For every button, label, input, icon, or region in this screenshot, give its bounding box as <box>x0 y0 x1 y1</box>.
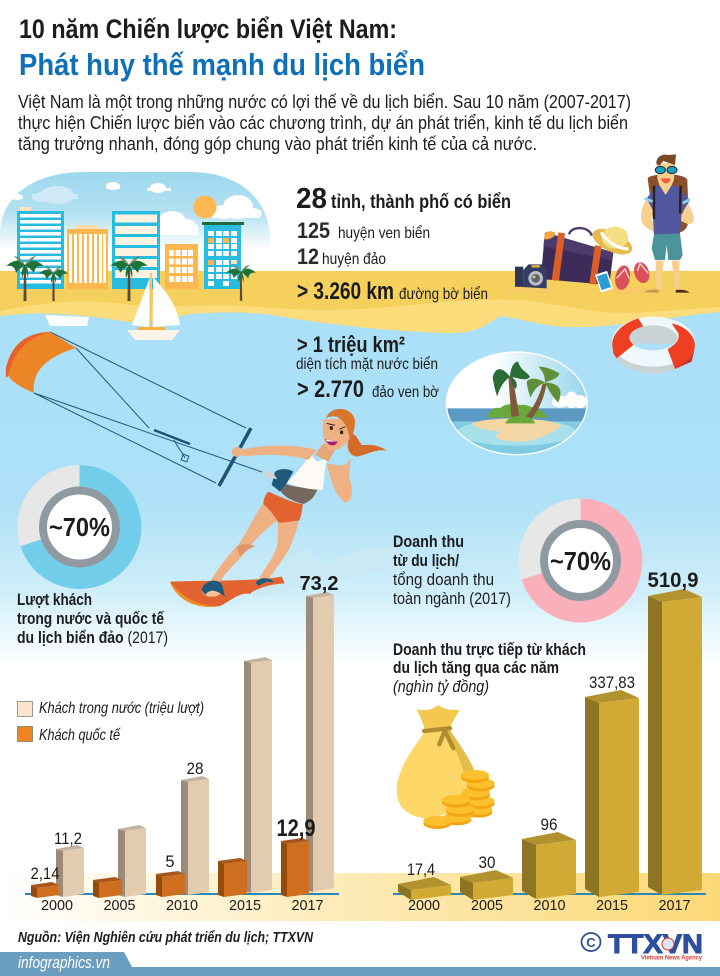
suitcase <box>541 231 613 285</box>
footer bar <box>0 952 720 976</box>
shorts <box>263 492 303 523</box>
shoes <box>644 290 690 293</box>
left coin stack <box>423 795 474 829</box>
year labels: 2015 <box>596 897 628 914</box>
beach sand <box>0 271 720 333</box>
white top <box>287 453 328 490</box>
label: visitors <box>17 590 168 647</box>
building 2 <box>67 225 108 289</box>
sunglasses <box>655 166 677 174</box>
label: revenue share: Doanh thu <box>393 532 464 551</box>
sailboat <box>127 273 180 340</box>
neck <box>315 443 335 462</box>
footer bar: infographics.vn <box>18 953 110 972</box>
woman kitesurfer <box>170 409 387 607</box>
sleeve cuffs <box>645 198 690 203</box>
value labels: 5 <box>165 853 175 871</box>
face <box>323 418 352 451</box>
heading: revenue chart: (nghìn tỷ đồng) <box>393 677 489 696</box>
bottom yellow band <box>0 873 720 921</box>
shorts <box>652 233 683 260</box>
palm fronds right <box>527 367 561 402</box>
eyes and mouth <box>325 423 345 445</box>
logo TTXVN: Vietnam News Agency <box>641 954 702 962</box>
stat: provinces <box>296 183 511 215</box>
stat: island districts <box>297 244 386 269</box>
bag neck <box>417 705 459 730</box>
year labels <box>408 897 690 914</box>
year labels: 2000 <box>41 897 73 914</box>
backpack straps <box>654 186 681 219</box>
camera <box>515 264 547 288</box>
value labels: 12,9 <box>276 815 316 842</box>
stat: coastal districts: 125 <box>297 218 330 243</box>
value labels <box>407 569 698 879</box>
shirt <box>647 186 690 235</box>
value labels: 73,2 <box>300 573 338 595</box>
legend: Khách trong nước (triệu lượt) <box>39 700 204 717</box>
title: 10 năm Chiến lược biển Việt Nam: <box>19 14 397 44</box>
year labels: 2005 <box>104 897 136 914</box>
front bush <box>505 416 535 423</box>
label: revenue share <box>393 532 511 608</box>
value labels: 11,2 <box>54 830 82 848</box>
heading: revenue chart: du lịch tăng qua các năm <box>393 658 559 677</box>
year labels: 2010 <box>166 897 198 914</box>
donut chart: revenue: ~70% <box>550 546 611 576</box>
ponytail <box>348 433 387 457</box>
small boat <box>45 315 89 326</box>
bar chart: revenue <box>398 569 702 914</box>
sun hat <box>589 224 636 260</box>
heading: revenue chart <box>393 640 586 696</box>
city buildings <box>17 207 244 289</box>
label: visitors: du lịch biển đảo (2017) <box>17 628 168 647</box>
building 1 <box>17 207 64 289</box>
stat: coastal islands: > 2.770 <box>297 376 364 403</box>
value labels: 510,9 <box>648 569 698 592</box>
value labels: 28 <box>186 760 204 778</box>
sand shore highlight <box>0 299 720 333</box>
source: Nguồn: Viện Nghiên cứu phát triển du lịch; TTXVN <box>18 929 314 946</box>
right coin stack <box>461 770 495 818</box>
logo TTXVN: C <box>586 935 596 950</box>
stat: sea area: diện tích mặt nước biển <box>296 355 438 373</box>
year labels: 2015 <box>229 897 261 914</box>
intro paragraph <box>18 91 631 154</box>
stat: sea area: > 1 triệu km² <box>297 332 405 357</box>
value labels: 337,83 <box>589 674 635 692</box>
stat: coastal districts <box>297 218 430 243</box>
legs <box>210 503 298 582</box>
icon: kite with lines and bar <box>6 332 262 486</box>
year labels: 2017 <box>658 897 690 914</box>
intro paragraph: thực hiện Chiến lược biển vào các chương trình, dự án phát triển, kinh tế du lịch biển <box>18 112 628 133</box>
donut chart: visitors <box>30 477 130 577</box>
sea background <box>0 300 720 665</box>
stat: provinces: 28 <box>296 183 327 215</box>
year labels: 2000 <box>408 897 440 914</box>
legend <box>18 700 204 744</box>
palm fronds left <box>493 362 530 397</box>
intro paragraph: tăng trưởng nhanh, đóng góp chung vào phát triển kinh tế của cả nước. <box>18 133 537 154</box>
phone <box>595 271 613 292</box>
arms <box>232 446 352 503</box>
island sand <box>472 419 562 442</box>
label: visitors: Lượt khách <box>17 590 92 609</box>
kiteboard <box>170 577 285 607</box>
stat: island districts: huyện đảo <box>322 251 386 268</box>
flip flops <box>613 260 652 291</box>
label: visitors: trong nước và quốc tế <box>17 609 164 628</box>
label: revenue share: toàn ngành (2017) <box>393 589 511 608</box>
tie <box>424 728 453 748</box>
suitcase handle <box>569 228 592 236</box>
year labels <box>41 897 324 914</box>
heading: revenue chart: Doanh thu trực tiếp từ khách <box>393 640 586 659</box>
stat: provinces: tỉnh, thành phố có biển <box>331 192 511 213</box>
intro paragraph: Việt Nam là một trong những nước có lợi thế về du lịch biển. Sau 10 năm (2007-2017) <box>18 91 631 112</box>
international bars <box>31 838 309 898</box>
hair <box>656 154 676 166</box>
money bag with coins <box>397 705 495 829</box>
island bushes <box>487 404 548 418</box>
value labels: 17,4 <box>407 861 435 879</box>
building 4 <box>165 244 198 289</box>
life ring <box>612 317 695 374</box>
domestic bars <box>56 592 334 897</box>
smile <box>661 178 671 183</box>
logo TTXVN: TTXVN <box>608 929 703 959</box>
stat: coastal islands <box>297 376 439 403</box>
building 5 <box>202 222 244 289</box>
stat: island districts: 12 <box>297 244 319 269</box>
bag <box>397 732 476 819</box>
island illustration <box>446 351 588 456</box>
stat: coastline: đường bờ biển <box>399 285 488 303</box>
bar chart: visitors <box>30 573 338 914</box>
year labels: 2017 <box>292 897 324 914</box>
harness hook <box>272 469 293 492</box>
harness belt <box>280 483 317 504</box>
stat: coastline: > 3.260 km <box>297 278 394 305</box>
donut chart: visitors: ~70% <box>49 512 110 542</box>
stat: coastal districts: huyện ven biển <box>338 224 430 242</box>
logo TTXVN <box>582 929 703 962</box>
value labels: 2,14 <box>30 865 60 883</box>
sand shadows <box>500 287 667 294</box>
label: revenue share: tổng doanh thu <box>393 570 494 589</box>
stat: sea area <box>296 332 438 373</box>
palm trees <box>6 256 256 301</box>
donut chart: revenue <box>530 510 630 610</box>
man with backpack <box>641 154 694 293</box>
foot straps <box>202 578 274 597</box>
value labels: 96 <box>540 816 558 834</box>
legend: Khách quốc tế <box>39 727 121 744</box>
backpack <box>648 174 689 232</box>
sky dome with clouds <box>0 172 270 246</box>
palm trunks <box>508 377 547 419</box>
year labels: 2005 <box>471 897 503 914</box>
arms <box>641 200 694 234</box>
stat: coastline <box>297 278 488 305</box>
label: revenue share: từ du lịch/ <box>393 551 459 570</box>
year labels: 2010 <box>534 897 566 914</box>
building 3 <box>112 211 160 289</box>
value labels: 30 <box>478 854 496 872</box>
value labels <box>30 573 338 883</box>
legs <box>656 261 680 290</box>
stat: coastal islands: đảo ven bờ <box>372 384 439 401</box>
hair <box>326 409 355 439</box>
neck and face <box>657 163 675 195</box>
axis lines <box>25 893 706 895</box>
travel items <box>500 224 667 294</box>
faint spray waves <box>225 543 400 597</box>
subtitle: Phát huy thế mạnh du lịch biển <box>19 47 425 82</box>
